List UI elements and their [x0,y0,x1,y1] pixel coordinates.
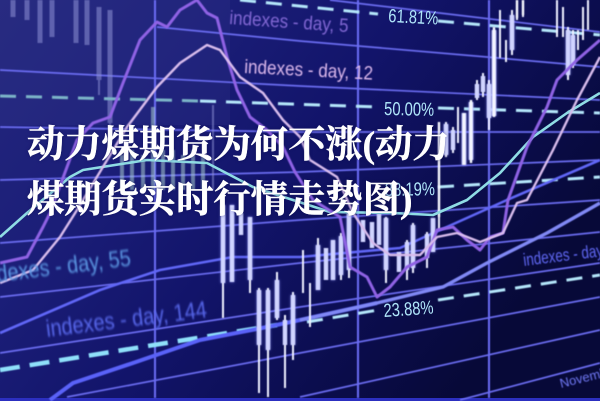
label: indexes day 5: indexes - day, 5 [229,6,349,37]
indicator line: day 5 [0,0,600,297]
label: indexes day 12: indexes - day, 12 [244,55,374,84]
label: 23.88%: 23.88% [383,297,434,321]
label: indexes day 144: indexes - day, 144 [44,296,208,342]
candlestick glow [223,15,573,350]
label: 50.00%: 50.00% [384,98,434,120]
title: 煤期货实时行情走势图) [27,180,412,221]
indicator line: day 200 [0,160,600,333]
indicator line: day 55 [0,93,600,237]
indicator line: day 12 [0,45,600,283]
faded candlesticks top left [13,0,213,190]
title: 动力煤期货为何不涨(动力 [27,125,450,166]
label: 38.19%: 38.19% [385,178,435,200]
right and lower candlesticks [223,0,588,397]
indicator line: day 144 [50,203,600,400]
label: 61.81%: 61.81% [388,5,439,29]
